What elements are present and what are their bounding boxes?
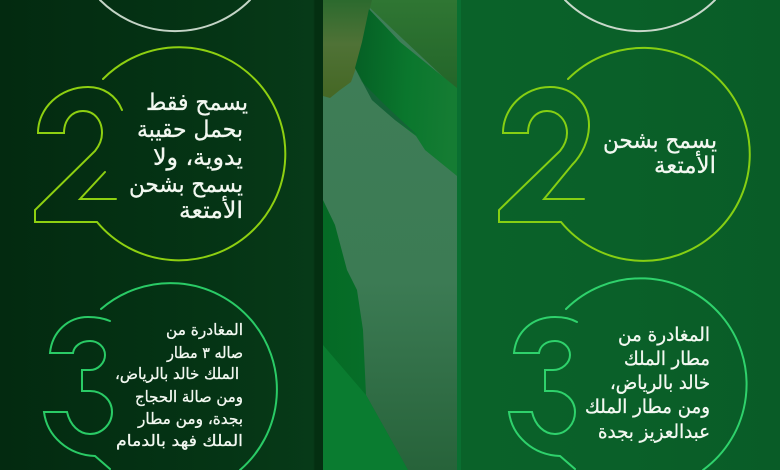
photo: lower green cloth xyxy=(323,200,408,470)
text: left item 2: بحمل حقيبة xyxy=(137,117,243,143)
numeral 2 with circle, left xyxy=(35,47,285,260)
text: left item 2 xyxy=(129,90,248,224)
text: left item 2: الأمتعة xyxy=(179,196,243,224)
text: right item 2: يسمح بشحن xyxy=(603,128,717,154)
text: left item 3 xyxy=(115,321,243,451)
panel: right background xyxy=(457,0,780,470)
text: left item 2: يسمح فقط xyxy=(146,90,248,116)
text: right item 3: المغادرة من xyxy=(618,324,710,346)
panel: left background xyxy=(0,0,323,470)
text: right item 3: خالد بالرياض، xyxy=(610,372,710,394)
text: left item 2: يسمح بشحن xyxy=(129,172,243,198)
photo: lower cloth fold xyxy=(323,345,408,470)
photo: backdrop xyxy=(323,0,457,90)
text: left item 3: بجدة، ومن مطار xyxy=(137,410,243,429)
text: left item 3: المغادرة من xyxy=(166,321,243,339)
text: left item 2: يدوية، ولا xyxy=(153,145,243,171)
right circle 1 fragment xyxy=(565,0,715,31)
photo: upper green cloth xyxy=(355,9,457,176)
text: left item 3: ومن صالة الحجاج xyxy=(135,388,243,407)
text: right item 2: الأمتعة xyxy=(654,151,716,179)
numeral 2 with circle, right xyxy=(499,48,750,261)
numeral 3 with circle, right xyxy=(509,278,747,470)
text: left item 3: الملك فهد بالدمام xyxy=(116,432,243,451)
numeral 3 with circle, left xyxy=(44,283,277,470)
text: right item 3: عبدالعزيز بجدة xyxy=(598,421,710,443)
text: right item 2 xyxy=(603,128,717,179)
left circle 1 fragment xyxy=(100,0,250,31)
text: left item 3: صاله ٣ مطار xyxy=(166,344,243,362)
text: right item 3 xyxy=(585,324,710,443)
text: right item 3: ومن مطار الملك xyxy=(585,396,710,418)
text: right item 3: مطار الملك xyxy=(624,348,710,370)
photo: cloth shadow xyxy=(355,68,418,136)
photo: shoulder xyxy=(323,0,372,98)
panel: central photo xyxy=(323,0,457,470)
text: left item 3: الملك خالد بالرياض، xyxy=(115,365,239,383)
